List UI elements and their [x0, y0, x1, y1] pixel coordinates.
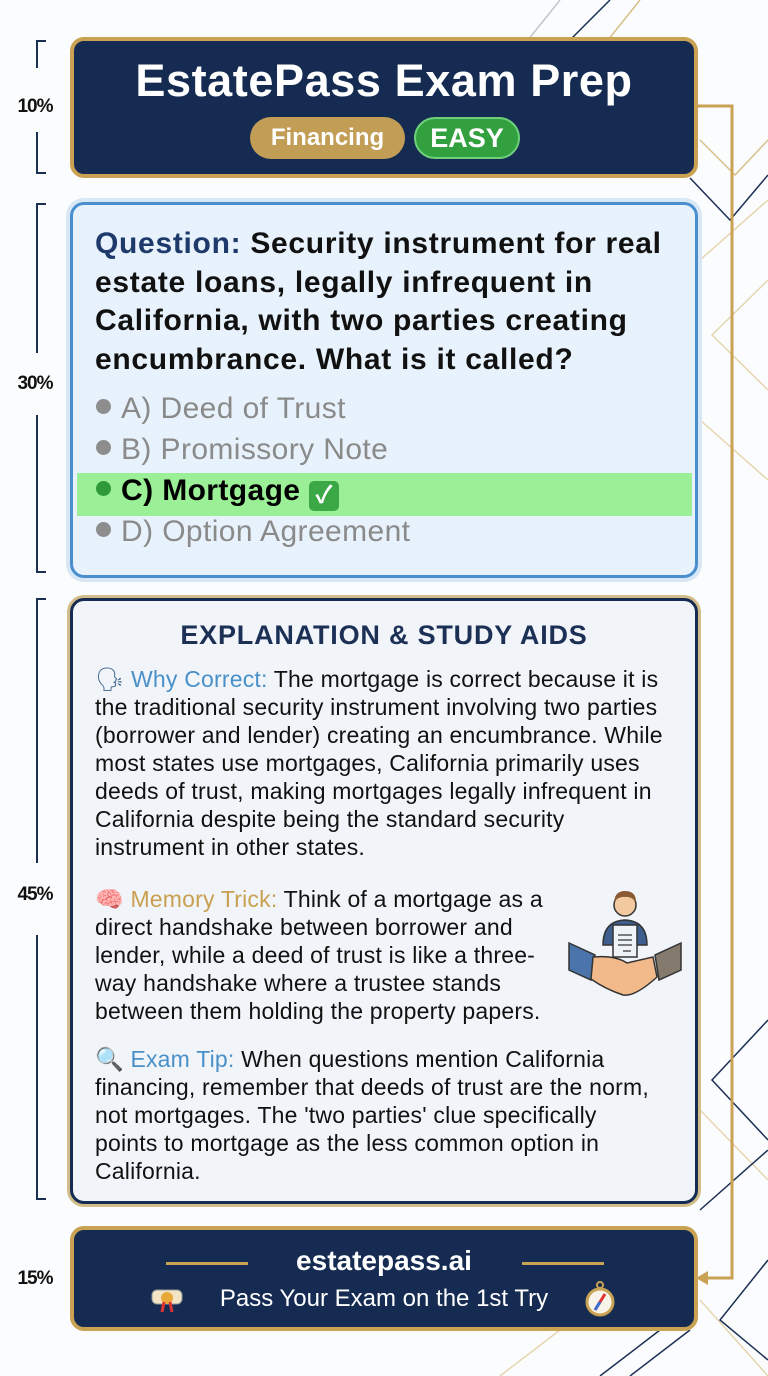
- memory trick: 🧠 Memory Trick: Think of a mortgage as a: [95, 886, 543, 912]
- answer options: A) Deed of Trust: [121, 392, 346, 425]
- percentage markers: [17, 40, 53, 1289]
- memory trick: way handshake where a trustee stands: [95, 970, 501, 996]
- answer options: D) Option Agreement: [121, 515, 410, 548]
- why correct: California despite being the standard security: [95, 806, 564, 832]
- question text: California, with two parties creating: [95, 304, 628, 337]
- footer panel: [70, 1226, 698, 1331]
- correct highlight: [77, 473, 692, 516]
- question text: Question: Security instrument for real: [95, 227, 662, 260]
- pill: EASY: [414, 117, 520, 159]
- footer decorative rules: [166, 1262, 248, 1265]
- question text: estate loans, legally infrequent in: [95, 266, 593, 298]
- question text: encumbrance. What is it called?: [95, 342, 573, 376]
- answer options: ✓: [315, 482, 333, 509]
- exam tip: California.: [95, 1158, 201, 1184]
- title: EstatePass Exam Prep: [135, 55, 633, 106]
- answer options: C) Mortgage: [121, 474, 300, 507]
- memory trick: between them holding the property papers.: [95, 998, 540, 1024]
- explanation panel: [70, 598, 698, 1204]
- percentage markers: 15%: [17, 1268, 53, 1289]
- icon: diploma: [152, 1290, 182, 1312]
- why correct: (borrower and lender) creating an encumbrance. While: [95, 722, 663, 748]
- why correct: the traditional security instrument involving two parties: [95, 694, 657, 720]
- why correct: [95, 666, 663, 860]
- why correct: 🗣 Why Correct: The mortgage is correct because it is: [95, 666, 658, 692]
- explanation heading: EXPLANATION & STUDY AIDS: [180, 620, 588, 650]
- exam tip: 🔍 Exam Tip: When questions mention California: [95, 1046, 604, 1072]
- exam tip: not mortgages. The 'two parties' clue specifically: [95, 1102, 597, 1128]
- question panel: [70, 202, 698, 578]
- memory trick: lender, while a deed of trust is like a three-: [95, 942, 535, 968]
- why correct: instrument in other states.: [95, 834, 365, 860]
- memory trick: direct handshake between borrower and: [95, 914, 513, 940]
- answer options: B) Promissory Note: [121, 433, 388, 466]
- memory trick: [95, 886, 543, 1024]
- pill: EASY: EASY: [430, 123, 504, 153]
- why correct: most states use mortgages, California primarily uses: [95, 750, 640, 776]
- pill: Financing: Financing: [271, 124, 384, 151]
- question text: [95, 227, 662, 376]
- percentage markers: 45%: [17, 884, 53, 905]
- icon: compass: [586, 1281, 614, 1316]
- percentage markers: 10%: [17, 96, 53, 117]
- icon: handshake with document: [568, 891, 682, 996]
- answer options: [96, 392, 410, 548]
- exam tip: financing, remember that deeds of trust are the norm,: [95, 1074, 649, 1100]
- header panel: [70, 37, 698, 178]
- pill: Financing: [250, 117, 405, 159]
- why correct: deeds of trust, making mortgages legally infrequent in: [95, 778, 652, 804]
- connector arrow: [698, 104, 734, 1285]
- percentage markers: 30%: [17, 373, 53, 394]
- exam tip: [95, 1046, 649, 1184]
- footer tagline: Pass Your Exam on the 1st Try: [220, 1285, 548, 1312]
- exam tip: points to mortgage as the less common option in: [95, 1130, 599, 1156]
- footer url: estatepass.ai: [296, 1245, 472, 1276]
